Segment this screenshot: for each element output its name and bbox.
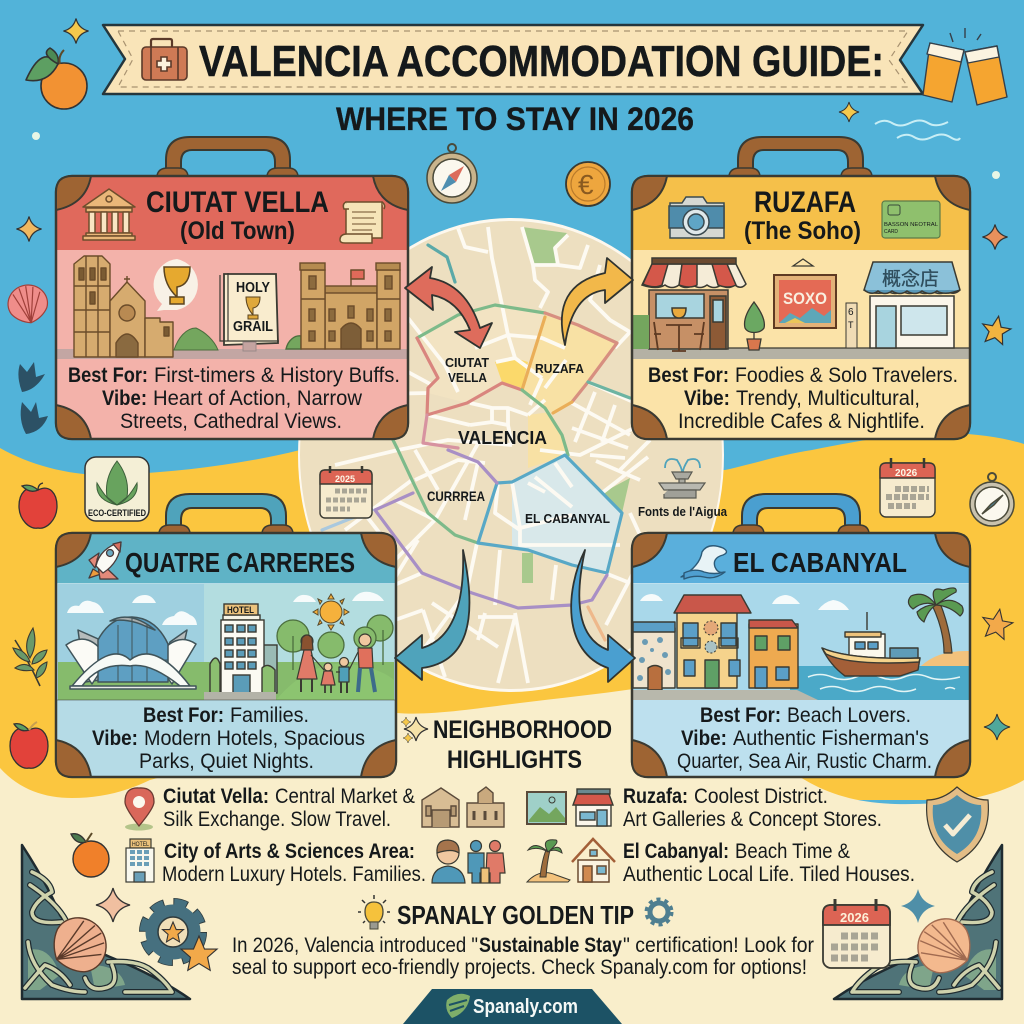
footer: Spanaly.com [403, 989, 622, 1024]
sparkle [16, 216, 42, 242]
icon: dark footprint [21, 402, 48, 434]
highlight: Ruzafa [623, 785, 882, 831]
star [980, 607, 1015, 640]
icon: greek temple [83, 189, 135, 240]
text: Ciutat Vella details: Best For: [68, 364, 148, 387]
sparkle [96, 888, 130, 922]
text: golden tip body [232, 934, 814, 979]
text: Ciutat Vella details: Heart of Action, Narrow [153, 387, 363, 410]
sea [790, 666, 969, 700]
icon: calendar 2026: 2026 [895, 468, 918, 479]
central city map: EL CABANYAL [525, 511, 610, 526]
text: Ciutat Vella details: Vibe: [102, 387, 147, 410]
trees and park [276, 615, 394, 700]
star [980, 314, 1013, 345]
text: Ruzafa details: Foodies & Solo Travelers. [735, 364, 958, 387]
text: Quatre Carreres details: Parks, Quiet Nights. [139, 750, 314, 773]
street sign: 6 [848, 307, 854, 318]
central city map: VALENCIA [458, 428, 547, 448]
text: El Cabanyal details: Vibe: [681, 727, 727, 750]
text: Ruzafa details: Trendy, Multicultural, [736, 387, 920, 410]
text: Ruzafa details [648, 364, 958, 433]
heading: Neighborhood Highlights: NEIGHBORHOOD [433, 716, 612, 744]
title banner: VALENCIA ACCOMMODATION GUIDE: [199, 37, 884, 86]
text: Quatre Carreres details: Families. [230, 704, 309, 727]
icon: calendar bottom: 2026 [840, 910, 869, 925]
concept store illustration [864, 262, 960, 348]
icon: euro coin: € [578, 169, 594, 200]
suitcase panel: Quatre Carreres: QUATRE CARRERES [125, 547, 355, 578]
text: El Cabanyal details [677, 704, 932, 773]
text: El Cabanyal details: Best For: [700, 704, 781, 727]
highlight: Ruzafa: Coolest District. [694, 785, 828, 808]
text: Ciutat Vella details [68, 364, 400, 433]
SOXO painting: SOXO [783, 289, 827, 308]
sparkle [64, 18, 88, 44]
central city map [290, 210, 730, 700]
suitcase panel: Ruzafa [632, 137, 970, 439]
icon: top left orange [26, 48, 87, 109]
highlight: City of Arts and Sciences: City of Arts & Sciences Area: [164, 840, 415, 863]
bush [174, 328, 218, 350]
highlight: Ciutat Vella: Ciutat Vella: [163, 785, 269, 808]
text: golden tip body: Sustainable Stay [479, 934, 622, 957]
title banner [103, 25, 923, 94]
icon: compass top [427, 144, 477, 203]
clouds [640, 594, 849, 610]
suitcase panel: Quatre Carreres [56, 494, 396, 777]
dot [992, 171, 1000, 179]
background: sand yellow wave [0, 433, 1024, 800]
sun [313, 594, 349, 630]
corner ornament left [22, 845, 190, 999]
street sign: T [848, 320, 854, 330]
Holy Grail book: HOLY [236, 280, 270, 296]
heading: Spanaly golden tip: SPANALY GOLDEN TIP [397, 900, 634, 930]
suitcase panel: Ruzafa: (The Soho) [744, 217, 861, 245]
cafe illustration [633, 258, 746, 351]
icon: compass right [970, 473, 1014, 526]
central city map: RUZAFA [535, 361, 585, 376]
highlight: City of Arts and Sciences: Modern Luxury Hotels. Families. [162, 863, 426, 886]
icon: dark footprint [18, 362, 45, 392]
central city map: CIUTAT [445, 355, 489, 370]
fishing boat [822, 612, 920, 676]
icon: credit card: CARD [884, 229, 898, 235]
icon: apple [10, 722, 48, 768]
highlight: El Cabanyal [623, 840, 915, 886]
arrow: yellow arrow to Ruzafa [562, 258, 633, 345]
clouds [67, 592, 384, 625]
subtitle: WHERE TO STAY IN 2026 [336, 101, 694, 137]
text: El Cabanyal details: Quarter, Sea Air, Rustic Charm. [677, 750, 932, 773]
text: Quatre Carreres details: Vibe: [92, 727, 138, 750]
icon: shield [927, 787, 988, 862]
central city map: CURRREA [427, 488, 485, 504]
Holy Grail book [220, 273, 279, 351]
icon: eco-certified badge [85, 457, 149, 521]
icon: gear and stars [144, 903, 217, 970]
background: cream lower section [0, 688, 1024, 1024]
icon: hotel: HOTEL [132, 842, 150, 848]
waves [875, 120, 960, 140]
dot [32, 132, 40, 140]
icon: fountain [659, 459, 705, 498]
icon: calendar 2025 [320, 466, 372, 518]
arrow: blue arrow to El Cabanyal [571, 550, 635, 682]
suitcase panel: Ruzafa: RUZAFA [754, 186, 856, 219]
palm tree [908, 588, 969, 666]
family figures [297, 634, 375, 693]
icon: calendar 2026 [880, 458, 935, 517]
suitcase panel: Ciutat Vella: (Old Town) [180, 217, 295, 245]
icon: rocket [89, 542, 121, 579]
hotel building: HOTEL [227, 605, 254, 615]
highlight: Ruzafa: Ruzafa: [623, 785, 688, 808]
hotel building [204, 604, 277, 700]
sparkle [984, 714, 1010, 740]
highlight: Ruzafa: Art Galleries & Concept Stores. [623, 808, 882, 831]
icon: scroll [340, 202, 385, 243]
highlight: El Cabanyal: El Cabanyal: [623, 840, 729, 863]
text: golden tip body: seal to support eco-friendly projects. Check Spanaly.com for options! [232, 956, 807, 979]
concept store illustration: 概念店 [882, 267, 939, 290]
suitcase panel: Ciutat Vella: CIUTAT VELLA [146, 186, 329, 219]
corner ornament right [834, 845, 1002, 999]
cathedral illustration [74, 256, 173, 357]
heading: Neighborhood Highlights [401, 716, 612, 774]
icon: lightbulb [358, 895, 390, 929]
icon: calendar 2025: 2025 [335, 474, 355, 484]
icon: small gear [646, 900, 672, 924]
icon: bottom orange [71, 833, 109, 877]
icon: olive sprig [13, 628, 47, 686]
label: Fonts de l'Aigua: Fonts de l'Aigua [638, 505, 728, 519]
icon: hotel [126, 839, 154, 882]
icon: beer glasses [923, 28, 1007, 105]
castle illustration [286, 263, 400, 349]
highlight: El Cabanyal: Beach Time & [735, 840, 850, 863]
icon: calendar bottom [823, 899, 890, 968]
text: Ruzafa details: Vibe: [684, 387, 730, 410]
text: Quatre Carreres details: Best For: [143, 704, 224, 727]
icon: shop [573, 789, 613, 826]
highlight: Ciutat Vella: Silk Exchange. Slow Travel. [163, 808, 391, 831]
icon: camera [669, 197, 724, 238]
grail speech bubble [154, 259, 198, 311]
street sign [846, 303, 857, 348]
SOXO painting [774, 259, 836, 328]
icon: people [432, 840, 505, 883]
icon: eco-certified badge: ECO-CERTIFIED [88, 508, 146, 519]
arrow: teal arrow to Quatre Carreres [395, 550, 469, 680]
highlight: El Cabanyal: Authentic Local Life. Tiled Houses. [623, 863, 915, 886]
suitcase panel: El Cabanyal [632, 494, 970, 777]
icon: wave [681, 546, 726, 579]
icon: map pin [125, 788, 154, 830]
icon: palm island [527, 840, 570, 882]
City of Arts building [66, 617, 196, 689]
sparkle [982, 224, 1008, 250]
icon: market and silk exchange buildings [422, 787, 504, 827]
text: El Cabanyal details: Authentic Fisherman's [733, 727, 929, 750]
icon: credit card [882, 201, 940, 238]
arrow: red double arrow to Ciutat Vella [405, 267, 492, 348]
text: golden tip body: " certification! Look for [623, 934, 814, 957]
icon: credit card: BASSON NEOTRAL [884, 222, 938, 228]
text: El Cabanyal details: Beach Lovers. [787, 704, 911, 727]
highlight: Ciutat Vella [125, 785, 415, 831]
potted plant [745, 302, 764, 350]
icon: first aid suitcase [142, 39, 187, 80]
footer: Spanaly.com: Spanaly.com [473, 996, 578, 1018]
Holy Grail book: GRAIL [233, 319, 273, 335]
suitcase panel: Ciutat Vella [56, 137, 408, 439]
icon: seashell [5, 282, 51, 326]
highlight: Ciutat Vella: Central Market & [275, 785, 415, 808]
icon: euro coin [566, 162, 610, 206]
central city map: VELLA [448, 370, 488, 385]
icon: apple [19, 483, 57, 528]
sparkle [839, 102, 859, 122]
icon: picture frame [527, 792, 566, 824]
icon: house [572, 839, 615, 882]
text: Quatre Carreres details [92, 704, 365, 773]
text: Ruzafa details: Incredible Cafes & Nightlife. [678, 410, 925, 433]
text: Quatre Carreres details: Modern Hotels, Spacious [144, 727, 365, 750]
text: Ciutat Vella details: First-timers & History Buffs. [154, 364, 400, 387]
text: Ruzafa details: Best For: [648, 364, 729, 387]
text: Ciutat Vella details: Streets, Cathedral Views. [120, 410, 342, 433]
heading: Neighborhood Highlights: HIGHLIGHTS [447, 746, 582, 774]
highlight: City of Arts and Sciences [162, 840, 426, 886]
tiled houses [633, 595, 818, 700]
suitcase panel: El Cabanyal: EL CABANYAL [733, 547, 907, 578]
sparkle [901, 889, 935, 923]
text: golden tip body: In 2026, Valencia introduced " [232, 934, 478, 957]
